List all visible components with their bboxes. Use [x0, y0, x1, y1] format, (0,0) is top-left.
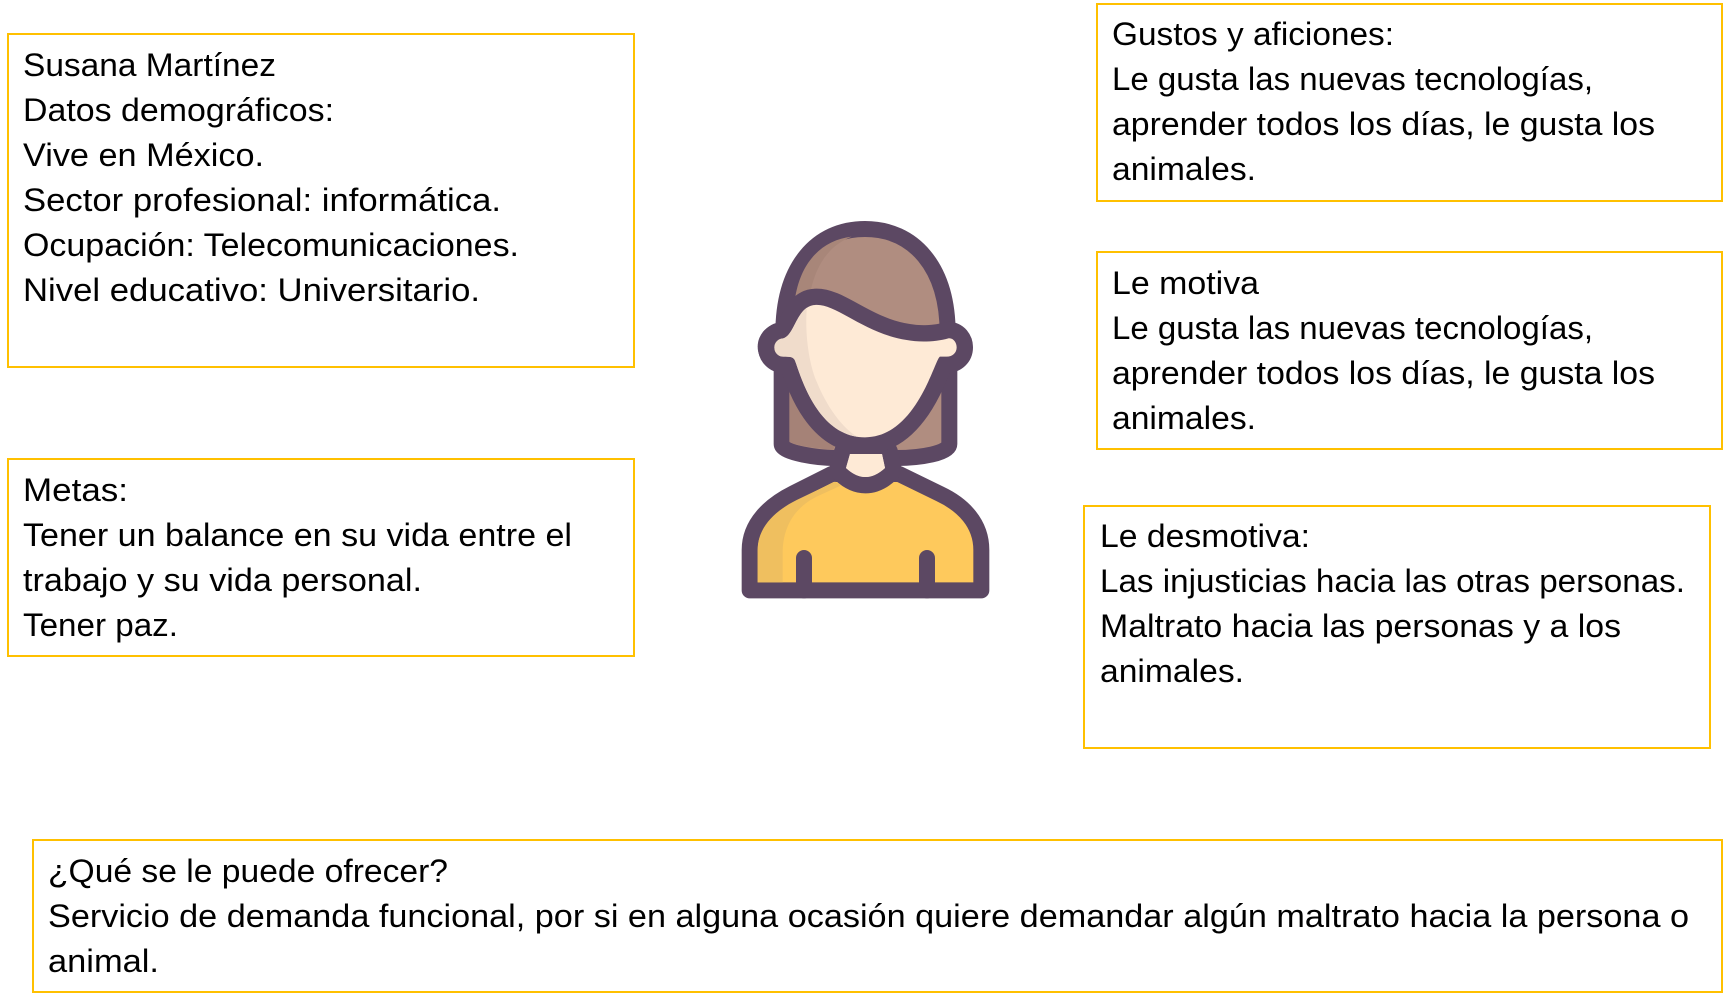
text: motivators: animales. — [1112, 400, 1256, 436]
text: goals: Tener paz. — [23, 607, 178, 643]
shirt — [750, 474, 981, 590]
neck outline — [846, 454, 885, 477]
text: motivators: Le gusta las nuevas tecnologías, — [1112, 310, 1593, 346]
text: demotivators: Le desmotiva: — [1100, 518, 1310, 554]
text: demographics: Vive en México. — [23, 137, 264, 173]
text: goals: Tener un balance en su vida entre el — [23, 517, 572, 553]
panel: motivators — [1097, 252, 1722, 449]
panel: goals — [8, 459, 634, 656]
ears outline — [758, 323, 973, 370]
text: goals — [23, 472, 572, 643]
text: demotivators: animales. — [1100, 653, 1244, 689]
icon: woman avatar — [750, 229, 981, 590]
lower hair shade — [789, 390, 835, 450]
lower hair — [782, 363, 949, 458]
panel: demographics — [8, 34, 634, 367]
text: likes and hobbies: Gustos y aficiones: — [1112, 16, 1394, 52]
face — [774, 305, 957, 437]
arm lines — [804, 558, 927, 590]
text: demotivators: Maltrato hacia las personas y a los — [1100, 608, 1621, 644]
panel: what can be offered — [33, 840, 1722, 992]
text: motivators — [1112, 265, 1655, 436]
neck — [846, 454, 885, 477]
text: demographics: Sector profesional: informática. — [23, 182, 501, 218]
panel: demotivators — [1084, 506, 1710, 748]
text: likes and hobbies: animales. — [1112, 151, 1256, 187]
text: goals: trabajo y su vida personal. — [23, 562, 422, 598]
upper hair shade — [795, 237, 852, 297]
text: demographics: Ocupación: Telecomunicaciones. — [23, 227, 519, 263]
text: likes and hobbies: aprender todos los días, le gusta los — [1112, 106, 1655, 142]
text: likes and hobbies: Le gusta las nuevas tecnologías, — [1112, 61, 1593, 97]
text: demographics: Nivel educativo: Universitario. — [23, 272, 480, 308]
text: goals: Metas: — [23, 472, 128, 508]
text: what can be offered: Servicio de demanda funcional, por si en alguna ocasión quiere demandar algún maltrato hacia la persona o — [48, 898, 1689, 934]
text: what can be offered: animal. — [48, 943, 159, 979]
text: demographics — [23, 47, 519, 308]
text: motivators: aprender todos los días, le gusta los — [1112, 355, 1655, 391]
face outline — [774, 305, 957, 437]
text: what can be offered: ¿Qué se le puede ofrecer? — [48, 853, 448, 889]
shirt shade — [758, 482, 841, 582]
text: demographics: Datos demográficos: — [23, 92, 334, 128]
text: demographics: Susana Martínez — [23, 47, 276, 83]
face shade — [774, 308, 858, 437]
panel: likes and hobbies — [1097, 4, 1722, 201]
neck top redraw — [846, 454, 885, 477]
text: motivators: Le motiva — [1112, 265, 1259, 301]
text: demotivators: Las injusticias hacia las otras personas. — [1100, 563, 1685, 599]
upper hair — [783, 229, 948, 333]
text: demotivators — [1100, 518, 1685, 689]
text: likes and hobbies — [1112, 16, 1655, 187]
text: what can be offered — [48, 853, 1689, 979]
